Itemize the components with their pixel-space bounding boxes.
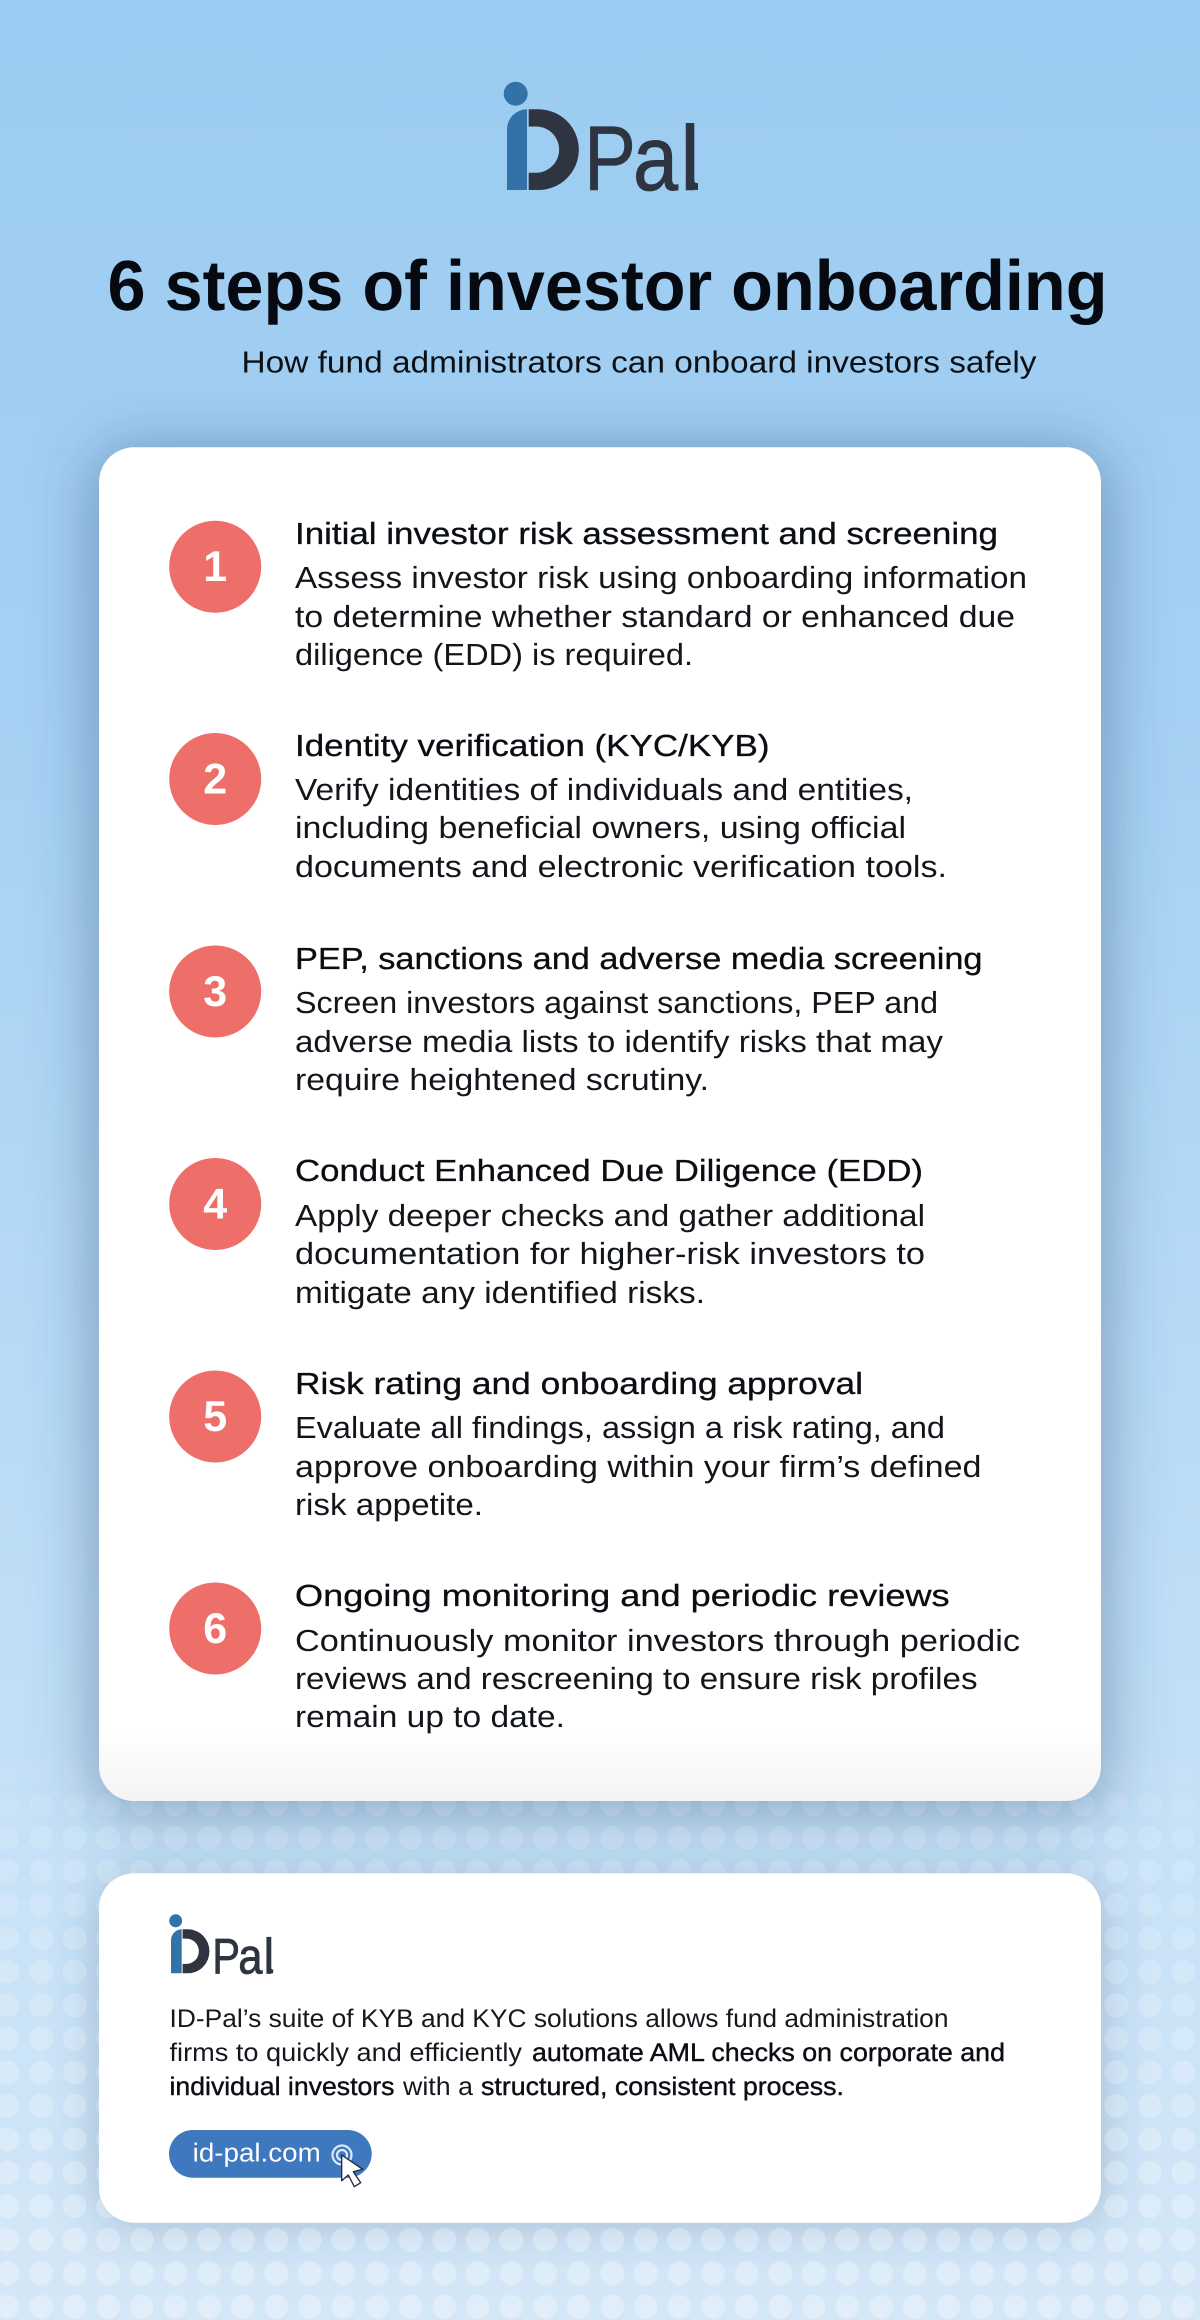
- step 5 badge: [169, 1370, 261, 1462]
- step 4 heading: Conduct Enhanced Due Diligence (EDD): [295, 1154, 923, 1188]
- small logo: [169, 1914, 274, 1984]
- small logo: a: [238, 1929, 263, 1984]
- logo: P: [584, 108, 636, 210]
- step 2 description: documents and electronic verification tools.: [295, 850, 947, 884]
- step 6 badge: [169, 1582, 261, 1674]
- step 2 badge: 2: [203, 756, 227, 804]
- step 3 badge: 3: [203, 968, 227, 1016]
- dot pattern: [0, 1801, 1196, 2318]
- icon: cursor arrow: [342, 2155, 363, 2187]
- about text: with a: [402, 2073, 474, 2101]
- step 3 heading: PEP, sanctions and adverse media screening: [295, 942, 982, 976]
- logo: l: [680, 108, 700, 210]
- step 1 heading: Initial investor risk assessment and screening: [295, 517, 998, 551]
- icon: click ripple: [332, 2146, 352, 2164]
- step 2 heading: Identity verification (KYC/KYB): [295, 729, 770, 763]
- logo: a: [633, 108, 679, 210]
- step 5 description: approve onboarding within your firm’s defined: [295, 1450, 982, 1484]
- about text: individual investors: [170, 2073, 394, 2101]
- step 5 heading: Risk rating and onboarding approval: [295, 1367, 863, 1401]
- step 2 description: [295, 773, 947, 884]
- step 6 description: Continuously monitor investors through periodic: [295, 1624, 1020, 1658]
- small logo: l: [264, 1929, 274, 1984]
- button: id-pal.com: [169, 2130, 372, 2187]
- step 4 description: documentation for higher-risk investors to: [295, 1237, 925, 1271]
- step 6: [169, 1579, 1020, 1734]
- step 1 badge: [169, 521, 261, 613]
- about text: structured, consistent process.: [481, 2073, 844, 2101]
- step 3 description: [295, 986, 944, 1097]
- step 5: [169, 1367, 982, 1522]
- step 2 description: Verify identities of individuals and entities,: [295, 773, 913, 807]
- step 6 badge: 6: [203, 1605, 227, 1653]
- step 6 description: [295, 1624, 1020, 1734]
- step 2 badge: [169, 733, 261, 825]
- step 3 description: require heightened scrutiny.: [295, 1063, 709, 1097]
- step 6 description: reviews and rescreening to ensure risk profiles: [295, 1662, 978, 1696]
- step 1 badge: 1: [203, 543, 227, 591]
- step 6 description: remain up to date.: [295, 1700, 565, 1734]
- step 1 description: to determine whether standard or enhanced due: [295, 600, 1015, 634]
- card shadow: about: [95, 1875, 1105, 2227]
- about text: automate AML checks on corporate and: [532, 2039, 1005, 2067]
- step 2: [169, 729, 947, 884]
- step 1 description: [295, 561, 1027, 672]
- panel: about card: [99, 1873, 1101, 2223]
- step 4 badge: 4: [203, 1180, 227, 1228]
- subtitle: How fund administrators can onboard investors safely: [242, 346, 1037, 380]
- step 3 badge: [169, 946, 261, 1038]
- small logo: P: [212, 1929, 240, 1984]
- step 1 description: diligence (EDD) is required.: [295, 638, 693, 672]
- card shadow: steps: [92, 447, 1108, 1815]
- step 5 description: risk appetite.: [295, 1488, 483, 1522]
- step 1 description: Assess investor risk using onboarding information: [295, 561, 1027, 595]
- step 3: [169, 942, 982, 1097]
- step 3 description: adverse media lists to identify risks that may: [295, 1025, 944, 1059]
- step 4 description: [295, 1199, 925, 1310]
- about text: ID-Pal’s suite of KYB and KYC solutions allows fund administration: [170, 2005, 948, 2033]
- logo: [504, 82, 700, 210]
- step 5 description: Evaluate all findings, assign a risk rating, and: [295, 1411, 945, 1445]
- step 4 description: Apply deeper checks and gather additional: [295, 1199, 925, 1233]
- step 4 badge: [169, 1158, 261, 1250]
- step 5 badge: 5: [203, 1393, 227, 1441]
- about text: [170, 2005, 1005, 2101]
- step 6 heading: Ongoing monitoring and periodic reviews: [295, 1579, 950, 1613]
- step 5 description: [295, 1411, 982, 1522]
- step 4 description: mitigate any identified risks.: [295, 1276, 705, 1310]
- step 3 description: Screen investors against sanctions, PEP and: [295, 986, 938, 1020]
- title: 6 steps of investor onboarding: [108, 247, 1108, 326]
- panel: steps card: [99, 447, 1101, 1801]
- button: id-pal.com: id-pal.com: [193, 2138, 321, 2168]
- step 1: [169, 517, 1027, 672]
- step 4: [169, 1154, 925, 1310]
- step 2 description: including beneficial owners, using official: [295, 811, 906, 845]
- about text: firms to quickly and efficiently: [170, 2039, 522, 2067]
